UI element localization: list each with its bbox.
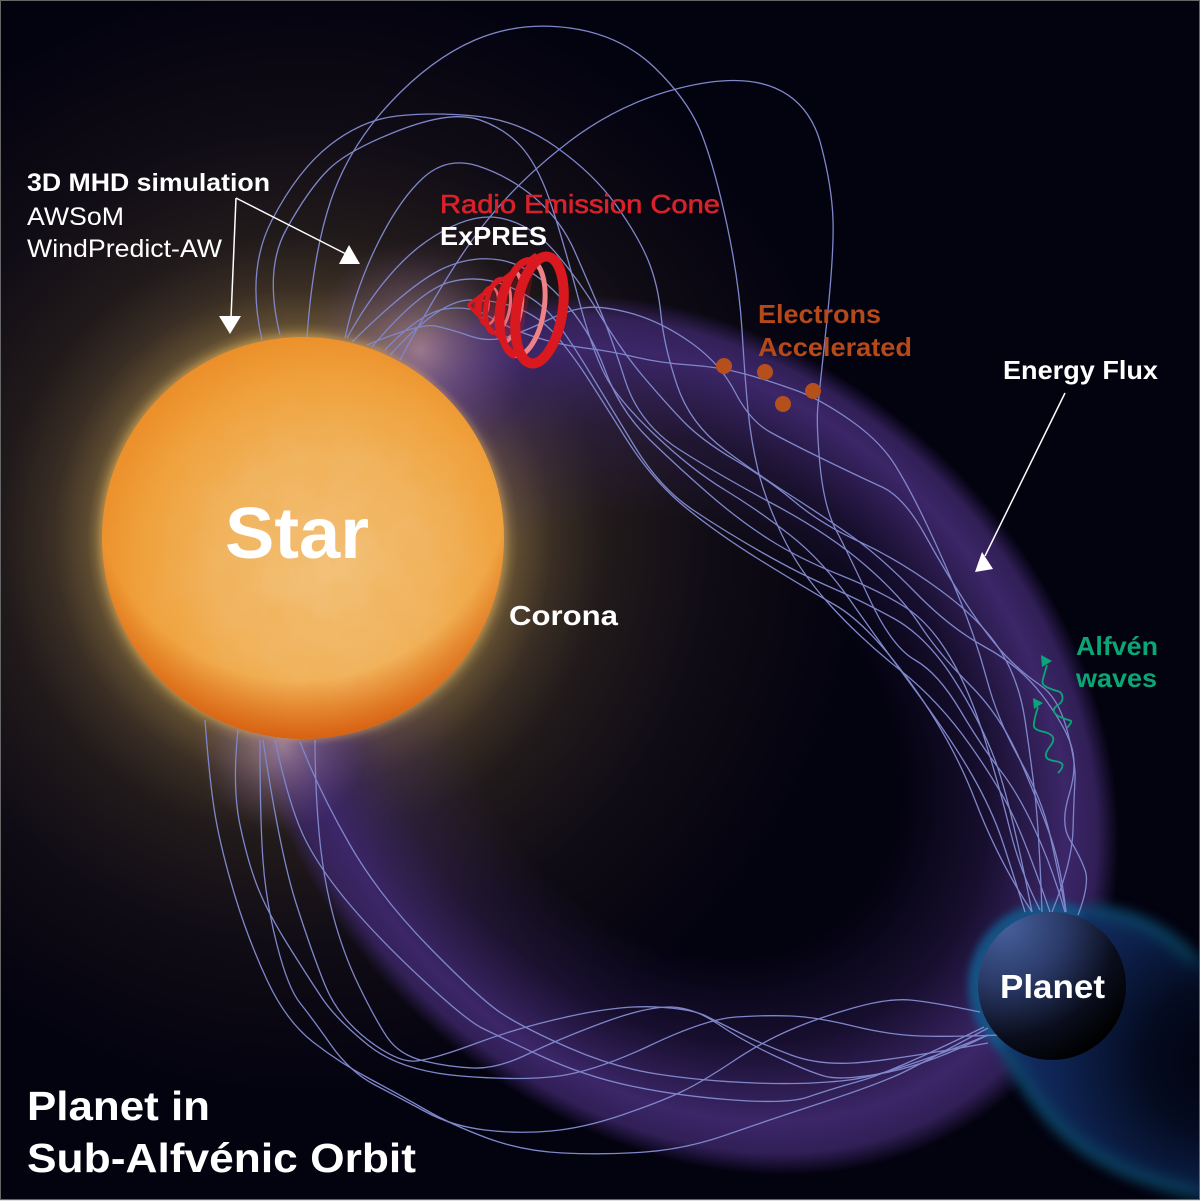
- label: electrons accelerated: [758, 299, 912, 362]
- planet wake: [968, 895, 1200, 1201]
- label: radio emission cone: Radio Emission Cone: [440, 189, 720, 219]
- arrows: 3D MHD simulation: [219, 198, 360, 334]
- label: radio emission cone: ExPRES: [440, 221, 547, 251]
- planet label: Planet: [1000, 968, 1105, 1005]
- label: 3D MHD simulation: AWSoM: [27, 203, 124, 231]
- arrow: energy flux: [975, 393, 1065, 572]
- Alfvén wave arrows: [1033, 655, 1071, 773]
- title: Planet in: [27, 1083, 210, 1129]
- planet: [978, 912, 1126, 1060]
- label: electrons accelerated: Electrons: [758, 299, 881, 329]
- label: Alfvén waves: [1075, 631, 1158, 693]
- label: Alfvén waves: waves: [1075, 663, 1157, 693]
- title: [27, 1083, 416, 1181]
- label: corona: Corona: [509, 600, 618, 631]
- label: energy flux: Energy Flux: [1003, 355, 1159, 385]
- label: 3D MHD simulation: 3D MHD simulation: [27, 169, 270, 197]
- electron dots: [716, 358, 821, 412]
- star label: Star: [225, 494, 369, 574]
- star: [99, 334, 507, 742]
- radio emission cone: [468, 253, 571, 367]
- magnetic field lines: star to planet, upper arc: [256, 26, 1086, 915]
- label: Alfvén waves: Alfvén: [1076, 631, 1158, 661]
- title: Sub-Alfvénic Orbit: [27, 1135, 416, 1181]
- label: electrons accelerated: Accelerated: [758, 332, 912, 362]
- magnetic field lines: star to planet, lower arc: [205, 720, 1000, 1154]
- label: radio emission cone: [440, 189, 720, 251]
- label: 3D MHD simulation: [27, 169, 270, 263]
- label: 3D MHD simulation: WindPredict-AW: [27, 235, 222, 263]
